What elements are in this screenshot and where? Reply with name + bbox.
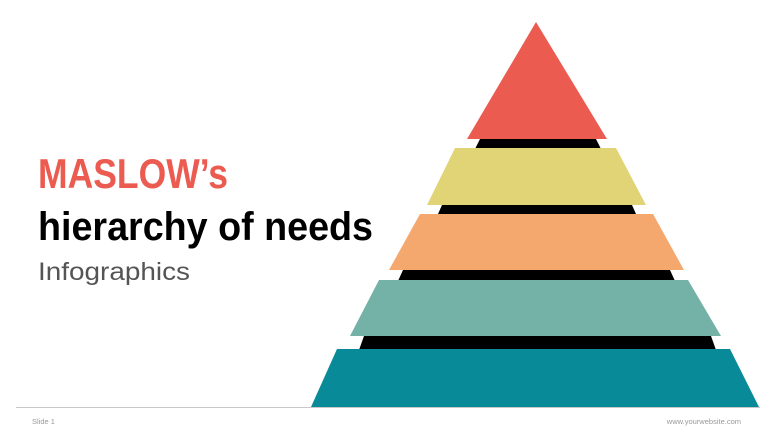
footer: slide number: Slide 1 bbox=[32, 417, 55, 426]
black band 4 bbox=[359, 336, 716, 350]
level 1: dark teal bbox=[311, 349, 759, 407]
title: MASLOW's: MASLOW’s bbox=[38, 150, 228, 197]
footer: website: www.yourwebsite.com bbox=[666, 417, 741, 426]
black band 2 bbox=[438, 205, 636, 214]
level 5: self-actualization (red triangle) bbox=[467, 22, 607, 139]
black band 1 bbox=[475, 139, 601, 149]
level 2: teal bbox=[350, 280, 721, 336]
subtitle: Infographics bbox=[38, 258, 190, 286]
level 4: yellow bbox=[427, 148, 646, 205]
footer line bbox=[16, 406, 760, 408]
black band 3 bbox=[398, 270, 675, 281]
title: hierarchy of needs: hierarchy of needs bbox=[38, 205, 373, 249]
level 3: orange bbox=[389, 214, 684, 270]
pyramid bbox=[311, 22, 759, 407]
